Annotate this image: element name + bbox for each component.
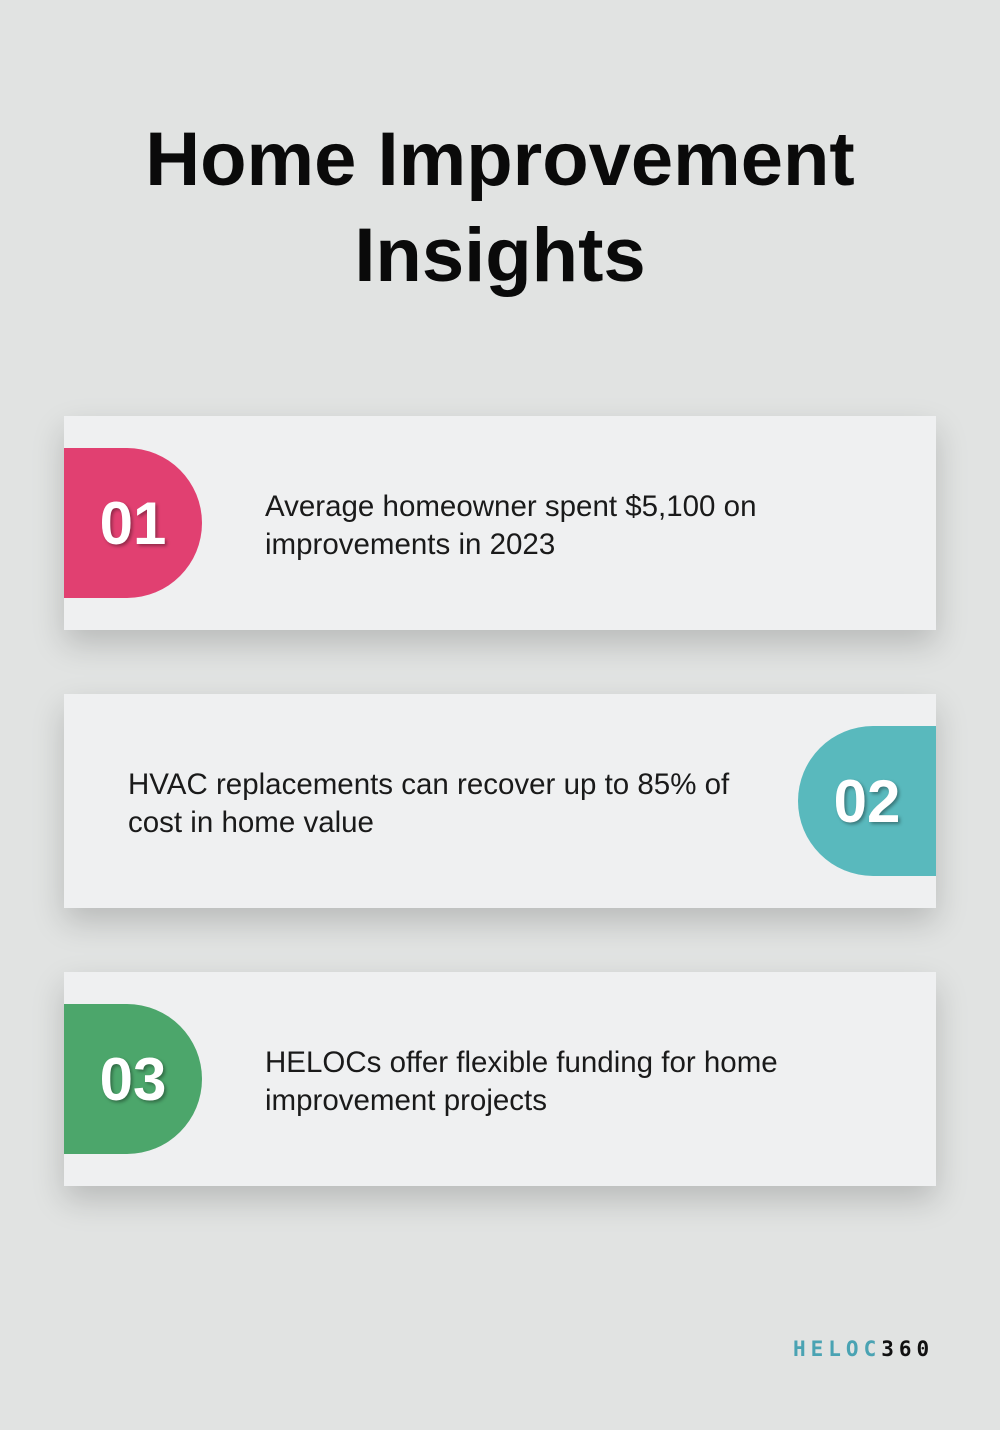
text 3: improvement projects [265,1084,547,1117]
badge 01: 01 [100,490,166,556]
title: Home Improvement [145,117,855,202]
badge 01 [64,448,202,598]
text 3: HELOCs offer flexible funding for home [265,1046,778,1079]
text 1: Average homeowner spent $5,100 on [265,490,756,523]
text 1: improvements in 2023 [265,528,555,561]
badge 02 [798,726,936,876]
text 3 [265,1046,778,1117]
badge 03 [64,1004,202,1154]
text 1 [265,490,756,561]
card 1 [64,416,936,630]
title [145,117,855,298]
title: Insights [354,213,646,298]
text 2: HVAC replacements can recover up to 85% of [128,768,729,801]
card 2 [64,694,936,908]
badge 02: 02 [834,768,900,834]
text 2 [128,768,730,839]
card 3 [64,972,936,1186]
badge 03: 03 [100,1046,166,1112]
text 2: cost in home value [128,806,374,839]
logo: HELOC360 [793,1337,934,1361]
